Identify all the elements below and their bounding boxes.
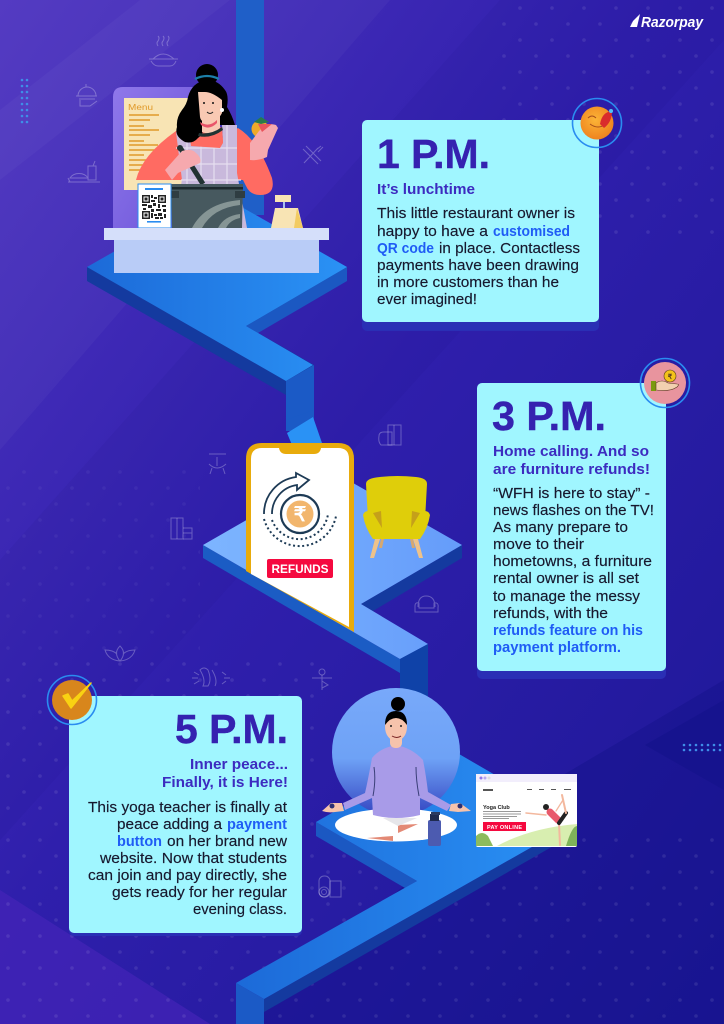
- subheading: Inner peace...: [190, 756, 288, 773]
- menu board: [113, 87, 196, 232]
- subheading: Finally, it is Here!: [162, 774, 288, 791]
- body text: payment: [227, 816, 287, 833]
- body text: gets ready for her regular: [112, 884, 287, 901]
- platform 2: [203, 471, 462, 705]
- illustration: armchair: [363, 476, 430, 558]
- body text: button: [117, 833, 162, 850]
- body text: customised: [493, 223, 570, 240]
- icon: armchair door: [379, 425, 401, 445]
- woman: [136, 64, 278, 228]
- heading: 1 P.M.: [377, 131, 490, 177]
- body text: payment platform.: [493, 639, 621, 656]
- website card: [476, 774, 577, 847]
- body text: news flashes on the TV!: [493, 502, 654, 519]
- icon: check mark badge: [48, 676, 96, 724]
- card: 5 P.M.: [69, 696, 302, 936]
- icon: meal tray: [68, 161, 100, 182]
- icon: wardrobe: [171, 518, 192, 539]
- icon: stool: [209, 454, 226, 474]
- body text: [493, 485, 654, 656]
- body text: rental owner is all set: [493, 570, 640, 587]
- refunds badge: REFUNDS: [272, 562, 328, 576]
- body text: on her brand new: [167, 833, 287, 850]
- menu board: Menu: [128, 102, 153, 112]
- subheading: [162, 756, 288, 791]
- subheading: are furniture refunds!: [493, 461, 650, 478]
- body text: evening class.: [193, 901, 287, 918]
- body text: This yoga teacher is finally at: [88, 799, 288, 816]
- body text: [377, 205, 580, 308]
- icon: yum emoji badge: [572, 98, 622, 148]
- body text: refunds feature on his: [493, 622, 643, 639]
- refund icon: ₹: [294, 504, 307, 526]
- illustration: yoga teacher: [322, 688, 471, 846]
- body text: refunds, with the: [493, 605, 608, 622]
- subheading: Home calling. And so: [493, 443, 649, 460]
- illustration: phone with refunds: [246, 443, 354, 632]
- icon: lotus: [105, 646, 135, 661]
- counter: [104, 228, 329, 273]
- body text: can join and pay directly, she: [88, 867, 287, 884]
- neck and face: [202, 115, 220, 133]
- body text: website. Now that students: [99, 850, 287, 867]
- water bottle: [428, 812, 441, 846]
- body text: peace adding a: [117, 816, 223, 833]
- left hand: [181, 149, 203, 184]
- icon: hand with rupee coin badge: ₹: [668, 373, 673, 381]
- body text: move to their: [493, 536, 584, 553]
- card: 1 P.M.: [362, 120, 599, 331]
- icon: yoga mat: [319, 876, 341, 897]
- body text: ever imagined!: [377, 291, 477, 308]
- icon: cloche: [76, 84, 97, 106]
- zigzag path: [87, 0, 576, 1024]
- cash register: [271, 195, 303, 228]
- icon: cutlery: [303, 146, 323, 164]
- body text: QR code: [377, 240, 434, 257]
- website card: Yoga Club: [483, 805, 510, 811]
- body text: happy to have a: [377, 223, 489, 240]
- body text: [88, 799, 288, 918]
- body text: hometowns, a furniture: [493, 553, 652, 570]
- icon: steaming dish: [149, 36, 178, 66]
- subheading: It’s lunchtime: [377, 181, 475, 198]
- refunds badge: [267, 559, 333, 578]
- website card: PAY ONLINE: [487, 825, 522, 831]
- icon: hand with rupee coin badge: [640, 358, 690, 408]
- line icons: [68, 36, 438, 897]
- body text: payments have been drawing: [377, 257, 579, 274]
- logo: Razorpay: [641, 14, 704, 31]
- dancer: [526, 795, 566, 845]
- body text: “WFH is here to stay” -: [493, 485, 650, 502]
- icon: sofa: [415, 596, 438, 612]
- subheading: [493, 443, 650, 478]
- platform 1: [87, 193, 347, 445]
- apron: [172, 125, 247, 228]
- platform 3: [236, 747, 576, 1024]
- pot: [171, 184, 245, 228]
- body text: This little restaurant owner is: [377, 205, 575, 222]
- body text: As many prepare to: [493, 519, 628, 536]
- heading: 5 P.M.: [175, 706, 288, 752]
- body text: in more customers than he: [377, 274, 559, 291]
- card: 3 P.M.: [477, 383, 666, 679]
- right hand: [252, 120, 268, 138]
- coral top: [136, 128, 273, 195]
- QR standee: [138, 184, 171, 228]
- body text: to manage the messy: [493, 588, 640, 605]
- heading: 3 P.M.: [492, 393, 606, 439]
- body text: in place. Contactless: [439, 240, 580, 257]
- illustration: restaurant: [104, 64, 329, 273]
- hair back: [176, 80, 235, 142]
- refund icon: [264, 473, 336, 546]
- icon: meditation pose: [192, 668, 230, 686]
- icon: yoga tree pose: [312, 669, 332, 690]
